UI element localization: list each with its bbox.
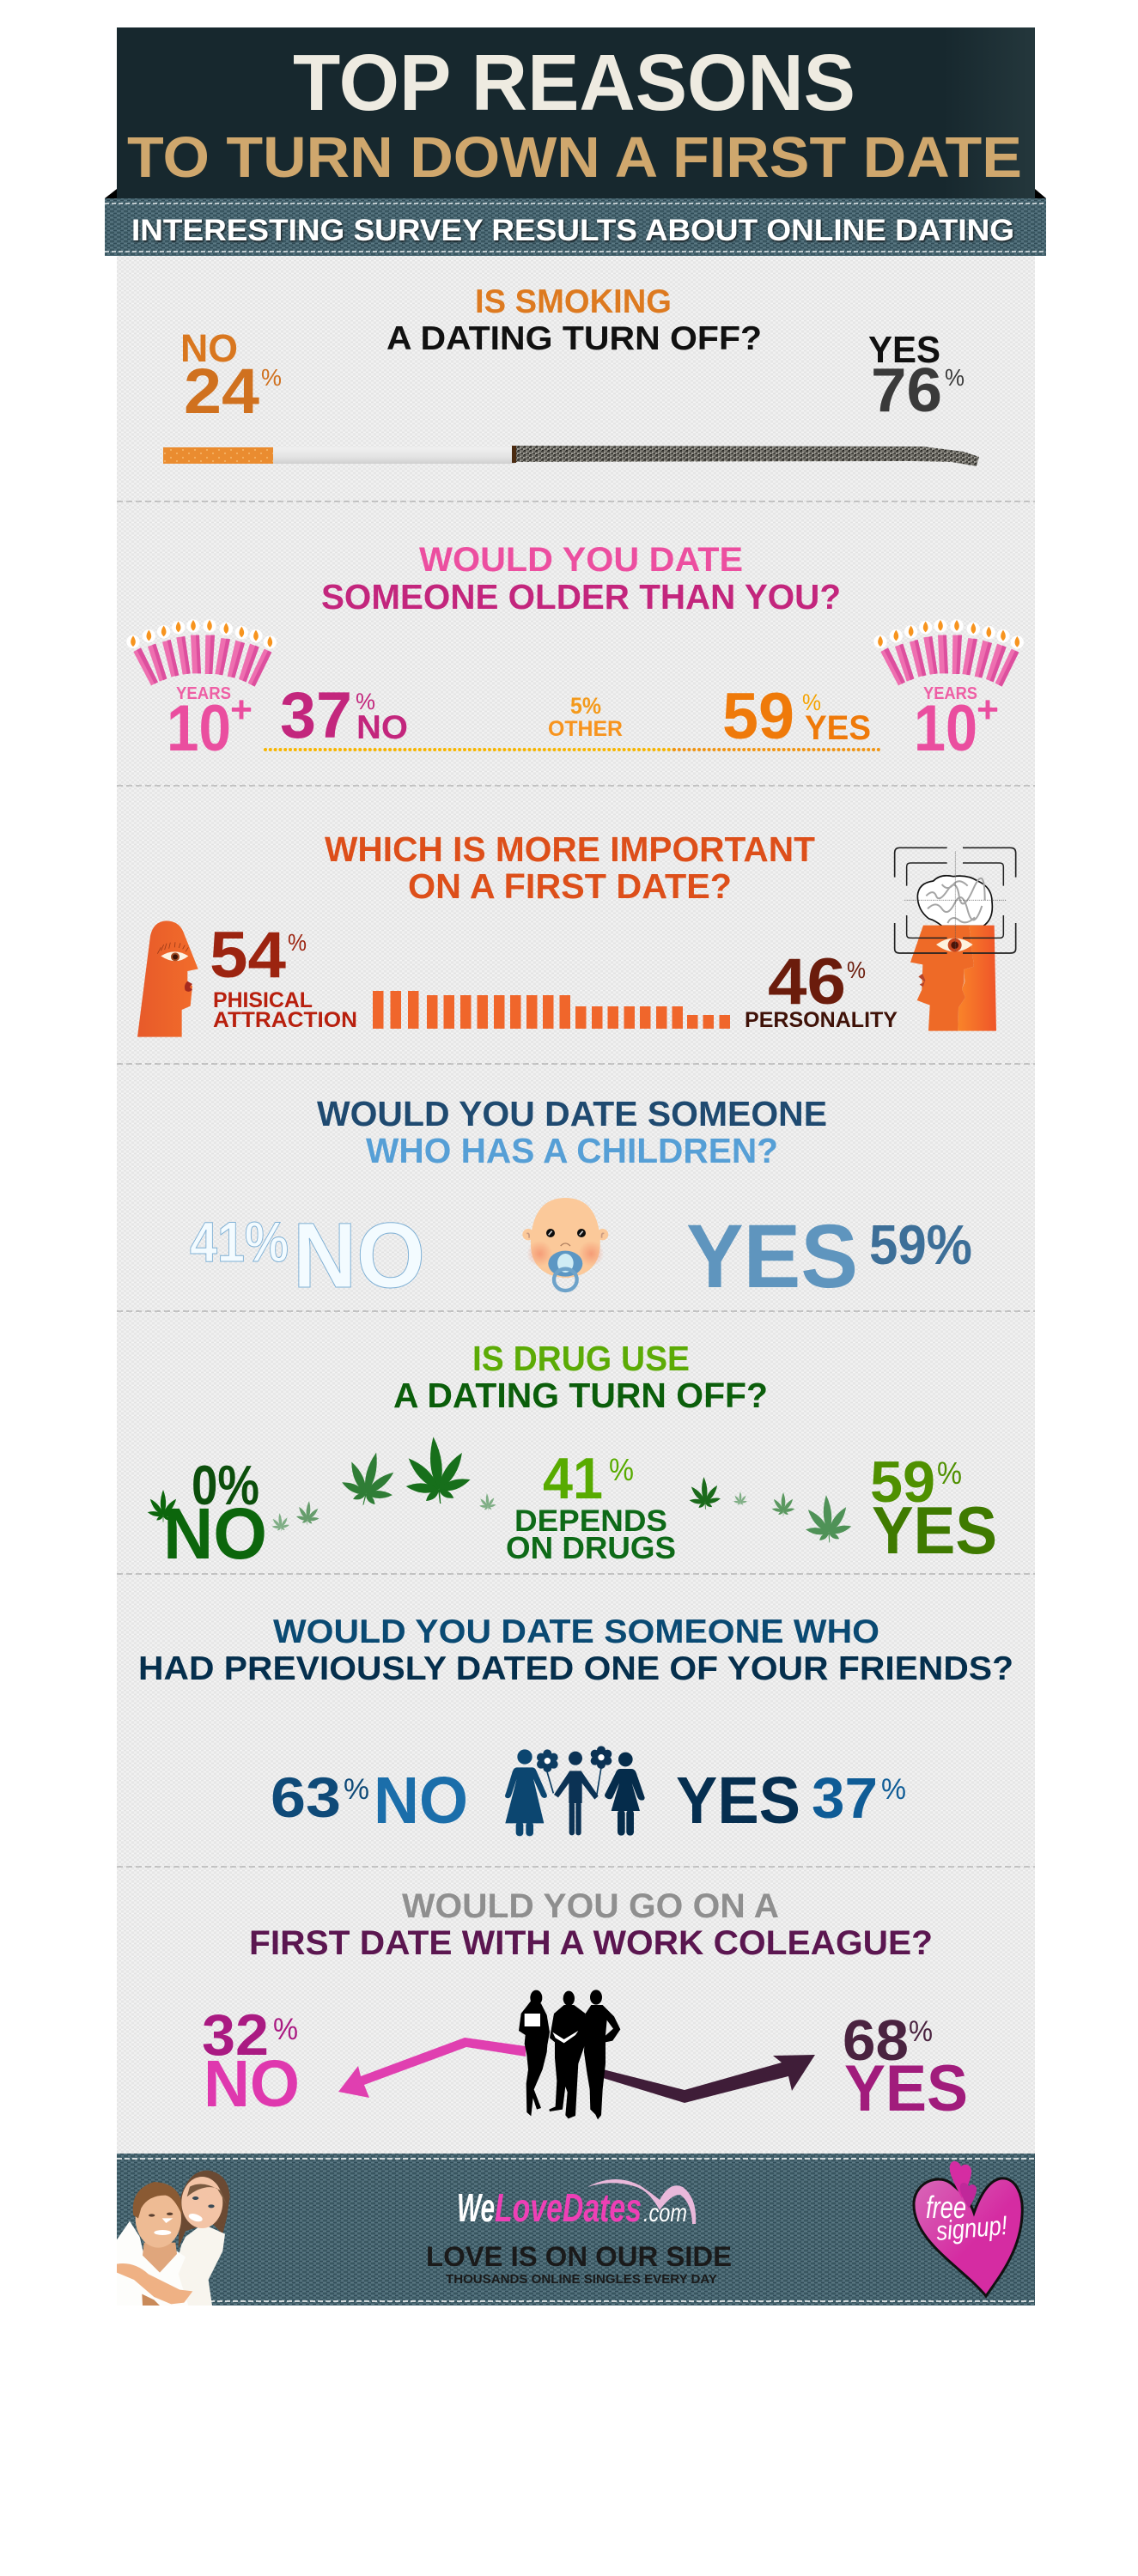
heading: friends bbox=[138, 1613, 1013, 1687]
stat: no 24 percent bbox=[180, 326, 282, 427]
heading: drugs bbox=[393, 1339, 768, 1415]
icon: candles right bbox=[873, 619, 1024, 687]
stat: no 63 percent: 63 bbox=[271, 1765, 341, 1829]
stat: no 0 percent: NO bbox=[163, 1493, 267, 1574]
ribbon fold right bbox=[1035, 189, 1046, 198]
heading: children: WOULD YOU DATE SOMEONE bbox=[317, 1094, 827, 1133]
icon: head with eye bbox=[137, 920, 198, 1037]
stat: yes 59 percent bbox=[686, 1206, 972, 1307]
icon: baby with pacifier bbox=[522, 1198, 608, 1291]
stat: other 5 percent bbox=[548, 693, 623, 741]
heading: older: SOMEONE OLDER THAN YOU? bbox=[321, 577, 841, 617]
stat: 46 percent personality: PERSONALITY bbox=[745, 1008, 898, 1032]
label: 10+ years left: 10 bbox=[167, 692, 231, 765]
stat: other 5 percent: OTHER bbox=[548, 717, 623, 741]
stat: no 24 percent: NO bbox=[180, 326, 238, 370]
stat: yes 59 percent bbox=[722, 680, 871, 753]
heading: importance: WHICH IS MORE IMPORTANT bbox=[325, 829, 815, 869]
title line one: TOP REASONS bbox=[293, 38, 855, 127]
stat: yes 76 percent bbox=[868, 329, 965, 425]
badge: free signup heart: signup! bbox=[935, 2210, 1009, 2246]
ribbon fold left bbox=[105, 189, 117, 198]
divider bbox=[117, 1063, 1035, 1065]
title line two: TO TURN DOWN A FIRST DATE bbox=[127, 125, 1022, 190]
stat: yes 37 percent bbox=[676, 1764, 906, 1838]
panel: drugs bbox=[147, 1339, 997, 1574]
icon: three colleagues silhouette bbox=[519, 1990, 620, 2119]
heading: smoking bbox=[386, 283, 762, 357]
divider bbox=[117, 501, 1035, 502]
stat: yes 68 percent: % bbox=[909, 2015, 933, 2048]
label: 10+ years right: 10 bbox=[914, 692, 977, 765]
icon: three friends with flowers bbox=[505, 1746, 645, 1836]
stat: yes 59 percent: YES bbox=[686, 1206, 858, 1307]
tagline: LOVE IS ON OUR SIDE bbox=[426, 2241, 732, 2272]
stat: depends 41 percent: ON DRUGS bbox=[506, 1530, 676, 1565]
divider bbox=[117, 1573, 1035, 1575]
stat: yes 37 percent: 37 bbox=[812, 1766, 878, 1831]
stat: no 41 percent bbox=[190, 1203, 425, 1307]
stat: depends 41 percent: DEPENDS bbox=[514, 1504, 667, 1538]
dotted scale line bbox=[265, 748, 882, 751]
stat: yes 76 percent: 76 bbox=[871, 356, 942, 425]
stat: 54 percent physical attraction: PHISICAL bbox=[213, 988, 313, 1012]
stat: 46 percent personality: % bbox=[847, 957, 866, 983]
stat: other 5 percent: 5% bbox=[570, 693, 601, 719]
divider bbox=[117, 1310, 1035, 1312]
stat: 54 percent physical attraction: ATTRACTION bbox=[213, 1008, 357, 1032]
logo: welovedates.com: LoveDates bbox=[495, 2185, 642, 2230]
stat: no 24 percent: 24 bbox=[184, 355, 259, 427]
stat: no 37 percent: 37 bbox=[280, 679, 352, 752]
photo: smiling couple bbox=[117, 2171, 230, 2306]
stat: no 32 percent: 32 bbox=[202, 2002, 269, 2068]
heading: colleague bbox=[249, 1887, 933, 1962]
stat: yes 59 percent: YES bbox=[805, 709, 871, 747]
background panel bbox=[117, 256, 1035, 2154]
heading: importance bbox=[325, 829, 815, 906]
label: 10+ years left: + bbox=[230, 689, 253, 731]
icon: head with brain under scanner bbox=[895, 848, 1016, 1031]
panel: children bbox=[190, 1094, 972, 1307]
badge: free signup heart: free bbox=[926, 2190, 966, 2225]
panel: older partner bbox=[126, 541, 1024, 765]
sub tagline: THOUSANDS ONLINE SINGLES EVERY DAY bbox=[446, 2272, 717, 2287]
label: 10+ years left: YEARS bbox=[176, 684, 231, 703]
heading: children: WHO HAS A CHILDREN? bbox=[366, 1131, 778, 1170]
stat: depends 41 percent: % bbox=[609, 1452, 634, 1487]
stat: no 37 percent: % bbox=[356, 689, 375, 714]
logo: welovedates.com: We bbox=[457, 2185, 495, 2230]
heading: smoking: IS SMOKING bbox=[475, 283, 672, 320]
stat: depends 41 percent: 41 bbox=[543, 1446, 603, 1511]
heading: importance: ON A FIRST DATE? bbox=[408, 866, 732, 906]
heading: colleague: FIRST DATE WITH A WORK COLEAGUE? bbox=[249, 1924, 933, 1962]
stat: no 37 percent bbox=[280, 679, 408, 752]
stat: no 24 percent: % bbox=[261, 364, 282, 391]
heading: friends: HAD PREVIOUSLY DATED ONE OF YOUR FRIENDS? bbox=[138, 1650, 1013, 1687]
stat: yes 59 percent bbox=[870, 1449, 997, 1568]
bar chart bbox=[373, 991, 730, 1029]
stat: no 0 percent bbox=[147, 1454, 267, 1574]
stat: yes 37 percent: % bbox=[881, 1773, 906, 1806]
header banner bbox=[117, 27, 1035, 198]
stat: 46 percent personality bbox=[745, 945, 898, 1032]
heading: drugs: A DATING TURN OFF? bbox=[393, 1376, 768, 1415]
label: 10+ years right: + bbox=[977, 689, 999, 731]
logo: welovedates.com: .com bbox=[643, 2199, 687, 2227]
arrow: pointing to yes bbox=[603, 2055, 815, 2103]
stat: yes 59 percent: 59 bbox=[870, 1449, 935, 1515]
heading: older bbox=[321, 541, 841, 617]
stat: 46 percent personality: 46 bbox=[768, 945, 846, 1018]
stat: yes 59 percent: % bbox=[802, 690, 821, 715]
heading: drugs: IS DRUG USE bbox=[472, 1339, 690, 1378]
stat: no 41 percent: NO bbox=[293, 1203, 425, 1307]
panel: smoking bbox=[163, 283, 979, 466]
stat: 54 percent physical attraction bbox=[210, 919, 357, 1032]
stat: yes 59 percent: 59 bbox=[722, 680, 794, 753]
stat: no 32 percent: NO bbox=[204, 2047, 300, 2121]
footer banner bbox=[117, 2154, 1035, 2306]
label: 10+ years right: YEARS bbox=[923, 684, 977, 703]
subtitle: INTERESTING SURVEY RESULTS ABOUT ONLINE DATING bbox=[131, 214, 1014, 247]
icons: leaves right bbox=[688, 1476, 853, 1544]
icon: burning cigarette bbox=[163, 446, 979, 466]
arrow: pointing to no bbox=[338, 2038, 526, 2098]
stat: no 63 percent: NO bbox=[374, 1764, 468, 1838]
heading: children bbox=[317, 1094, 827, 1170]
icons: leaves left bbox=[271, 1433, 496, 1532]
panel: looks vs personality bbox=[137, 829, 1016, 1037]
icon: candles left bbox=[126, 619, 277, 687]
stat: yes 68 percent: YES bbox=[844, 2052, 968, 2125]
panel: work colleague bbox=[202, 1887, 968, 2125]
stat: no 32 percent: % bbox=[273, 2013, 298, 2046]
stat: no 32 percent bbox=[202, 2002, 300, 2121]
heading: older: WOULD YOU DATE bbox=[419, 541, 743, 579]
stat: yes 59 percent: YES bbox=[872, 1492, 997, 1568]
stat: yes 59 percent: % bbox=[937, 1455, 962, 1491]
divider bbox=[117, 785, 1035, 787]
divider bbox=[117, 1866, 1035, 1868]
stat: 54 percent physical attraction: % bbox=[288, 929, 307, 956]
stat: yes 59 percent: 59% bbox=[869, 1213, 972, 1276]
heading: friends: WOULD YOU DATE SOMEONE WHO bbox=[273, 1613, 879, 1650]
stat: yes 76 percent: YES bbox=[868, 329, 940, 371]
stat: no 0 percent: 0% bbox=[192, 1454, 259, 1516]
heading: smoking: A DATING TURN OFF? bbox=[386, 320, 762, 357]
badge: free signup heart bbox=[914, 2161, 1022, 2296]
panel: friends' exes bbox=[138, 1613, 1013, 1838]
stat: yes 37 percent: YES bbox=[676, 1764, 800, 1838]
stat: 54 percent physical attraction: 54 bbox=[210, 919, 286, 992]
stat: no 63 percent: % bbox=[344, 1773, 369, 1806]
heading: colleague: WOULD YOU GO ON A bbox=[402, 1887, 779, 1925]
stat: yes 76 percent: % bbox=[945, 364, 965, 391]
stat: depends 41 percent bbox=[506, 1446, 676, 1565]
stat: yes 68 percent bbox=[843, 2008, 968, 2125]
stat: no 41 percent: 41% bbox=[190, 1210, 289, 1273]
subtitle ribbon bbox=[105, 198, 1046, 256]
stat: no 63 percent bbox=[271, 1764, 468, 1838]
stat: no 37 percent: NO bbox=[356, 709, 408, 746]
stat: yes 68 percent: 68 bbox=[843, 2008, 909, 2073]
